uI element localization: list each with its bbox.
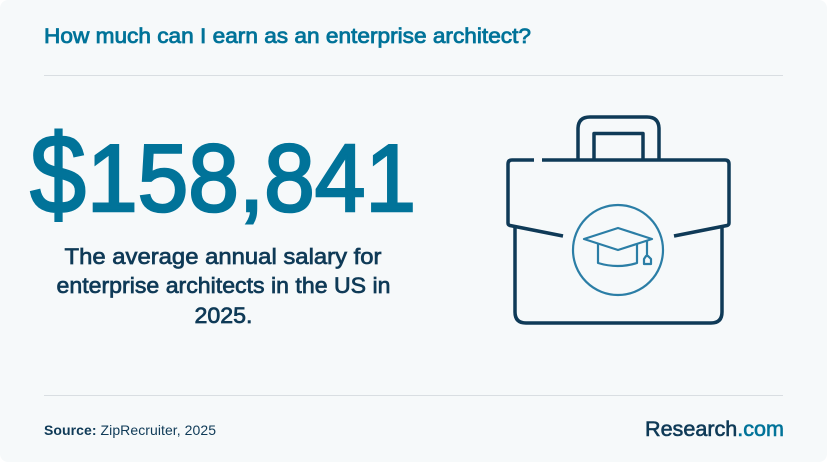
source note: Source: ZipRecruiter, 2025 [44, 422, 216, 438]
logo: Research.com: Research.com [645, 417, 784, 441]
icon: briefcase with graduation cap [508, 117, 729, 323]
salary description: enterprise architects in the US in [56, 273, 390, 298]
salary figure: $ [30, 112, 86, 237]
icon: graduation cap badge [573, 205, 663, 295]
salary description: 2025. [194, 303, 252, 328]
salary figure: 158,841 [87, 125, 416, 232]
icon: briefcase outline [508, 117, 729, 323]
title: How much can I earn as an enterprise architect? [44, 24, 531, 48]
salary description [56, 244, 390, 328]
salary description: The average annual salary for [64, 244, 382, 269]
